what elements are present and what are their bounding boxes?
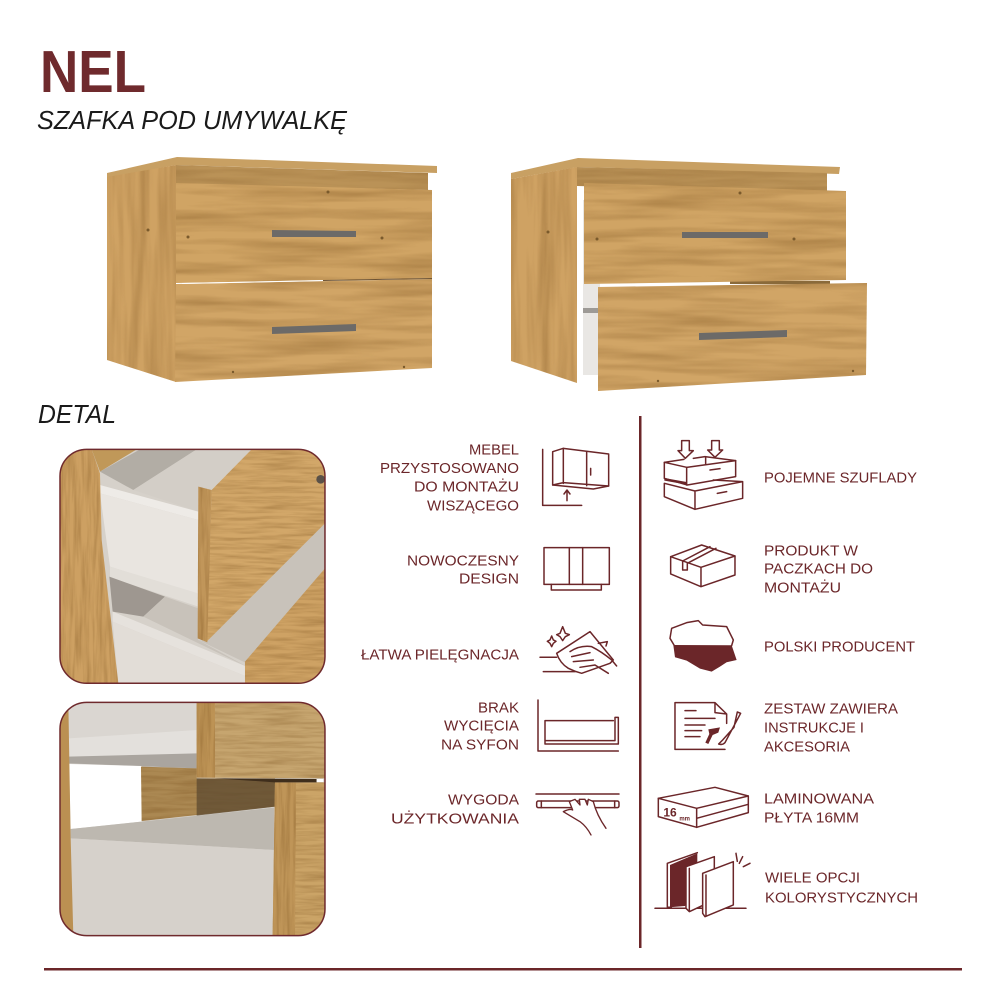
bottom rule <box>44 968 962 970</box>
feature: flat packed <box>671 544 873 596</box>
label: colour options <box>765 870 918 906</box>
label: easy care: ŁATWA PIELĘGNACJA <box>361 648 519 664</box>
label: 16mm board: PŁYTA 16MM <box>764 810 859 826</box>
feature: kit contents <box>675 702 898 756</box>
label: comfort of use: UŻYTKOWANIA <box>391 810 519 828</box>
icon: laminated board <box>658 787 748 827</box>
feature: comfort of use <box>391 792 619 835</box>
feature: polish manufacturer <box>670 621 915 672</box>
label: wall mounted: WISZĄCEGO <box>427 498 519 514</box>
divider <box>639 416 642 948</box>
label: modern design: DESIGN <box>459 572 519 588</box>
panel: drawer detail bottom <box>60 702 325 936</box>
label: kit contents: AKCESORIA <box>764 740 850 756</box>
icon: parcel <box>671 545 735 587</box>
label: comfort of use: WYGODA <box>448 792 519 808</box>
feature: 16mm board <box>658 787 874 827</box>
label: 16mm board <box>764 792 874 826</box>
label: kit contents: ZESTAW ZAWIERA <box>764 702 898 718</box>
subtitle: SZAFKA POD UMYWALKĘ <box>37 107 348 135</box>
label: colour options: WIELE OPCJI <box>765 870 860 886</box>
label: modern design <box>407 554 519 588</box>
label: flat packed: PACZKACH DO <box>764 562 873 578</box>
feature: modern design <box>407 548 609 590</box>
label: colour options: KOLORYSTYCZNYCH <box>765 890 918 906</box>
heading: detal: DETAL <box>38 401 116 429</box>
panel: open drawer detail top <box>60 449 325 683</box>
label: no siphon cut-out <box>441 700 519 754</box>
label: wall mounted <box>380 442 519 514</box>
title: NEL <box>40 39 146 105</box>
feature: colour options <box>655 853 918 917</box>
icon: laminated board: 16 <box>663 806 677 820</box>
label: flat packed: PRODUKT W <box>764 544 858 560</box>
feature: roomy drawers <box>664 441 917 509</box>
cabinet: drawers closed <box>107 157 437 382</box>
icon: front cabinet <box>544 548 609 590</box>
label: roomy drawers: POJEMNE SZUFLADY <box>764 470 917 486</box>
label: wall mounted: DO MONTAŻU <box>414 478 519 496</box>
cabinet: drawers open <box>511 158 867 391</box>
label: polish manufacturer: POLSKI PRODUCENT <box>764 640 915 656</box>
feature: wall mounted <box>380 442 609 514</box>
icon: hand on handle <box>536 794 619 835</box>
icon: laminated board: mm <box>679 817 690 823</box>
label: wall mounted: PRZYSTOSOWANO <box>380 461 519 477</box>
label: flat packed: MONTAŻU <box>764 578 841 596</box>
label: kit contents <box>764 702 898 756</box>
label: kit contents: INSTRUKCJE I <box>764 720 864 736</box>
feature: easy care <box>361 627 617 673</box>
label: flat packed <box>764 544 873 596</box>
icon: instructions and accessories <box>675 703 741 749</box>
label: no siphon cut-out: NA SYFON <box>441 738 519 754</box>
label: 16mm board: LAMINOWANA <box>764 792 874 808</box>
icon: poland map <box>670 621 737 672</box>
icon: wall cabinet <box>543 448 609 505</box>
label: no siphon cut-out: WYCIĘCIA <box>444 718 519 734</box>
icon: stacked drawers <box>664 441 743 509</box>
icon: drawer profile <box>538 700 618 751</box>
icon: wiping hand <box>540 627 617 673</box>
label: wall mounted: MEBEL <box>469 442 519 458</box>
label: no siphon cut-out: BRAK <box>478 700 519 716</box>
feature: no siphon cut-out <box>441 700 618 754</box>
label: modern design: NOWOCZESNY <box>407 554 519 570</box>
icon: colour samples <box>655 853 750 917</box>
label: comfort of use <box>391 792 519 828</box>
